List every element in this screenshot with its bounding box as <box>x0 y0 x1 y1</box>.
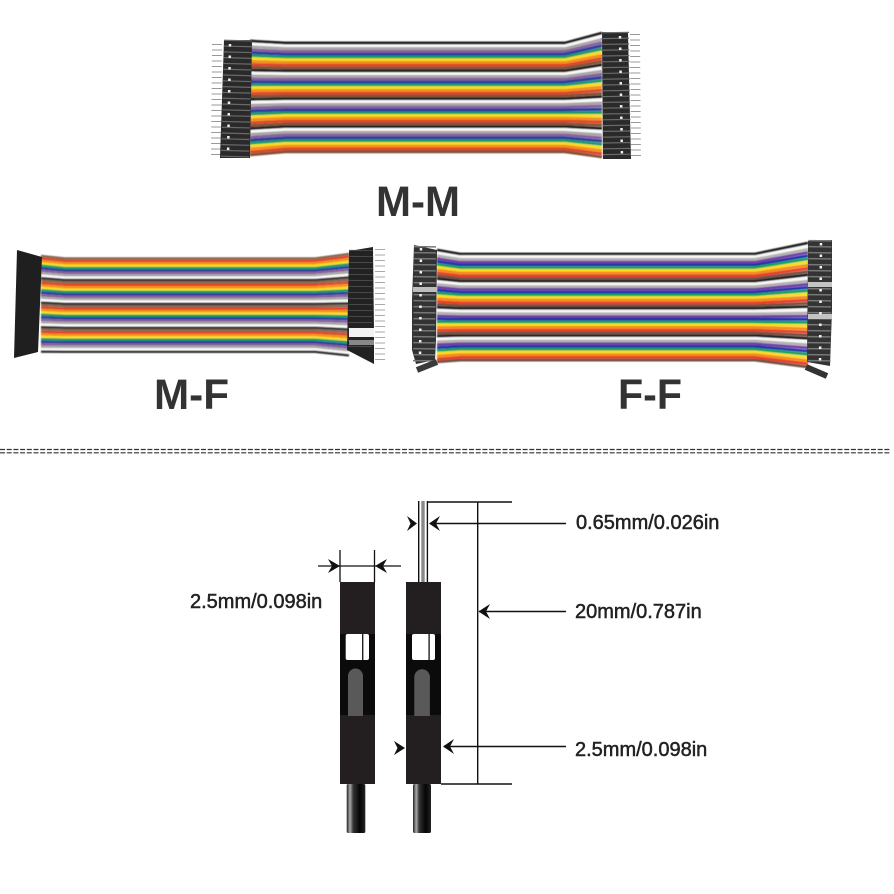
heading: M-M: M-M <box>376 178 460 226</box>
M-F rainbow wires <box>41 254 349 355</box>
M-M right connectors <box>602 32 636 159</box>
F-F rainbow wires <box>437 243 808 367</box>
dashed double divider <box>0 450 890 453</box>
label: 20mm: 20mm/0.787in <box>575 601 702 623</box>
wire pin at top of right connector <box>419 501 427 582</box>
arrow: 0.65mm pin width <box>407 516 566 531</box>
M-M left connectors <box>216 40 252 158</box>
M-F female connectors <box>14 250 42 358</box>
M-M rainbow wires <box>250 33 602 157</box>
label: 2.5mm left: 2.5mm/0.098in <box>190 591 322 613</box>
M-F jumper wire bundle <box>14 247 380 364</box>
left connector diagram <box>340 582 375 833</box>
arrow: 2.5mm connector width <box>394 739 566 755</box>
heading: M-F: M-F <box>154 371 229 419</box>
arrow: left width 2.5mm <box>318 550 401 582</box>
F-F jumper wire bundle <box>412 240 832 376</box>
label: 0.65mm: 0.65mm/0.026in <box>576 512 719 534</box>
dimension lines: 20mm length <box>427 502 512 784</box>
M-F male connectors <box>347 247 380 364</box>
M-M jumper wire bundle <box>216 32 636 159</box>
arrow: 20mm length <box>478 604 566 619</box>
label: 2.5mm right: 2.5mm/0.098in <box>575 739 707 761</box>
F-F right connectors <box>806 240 832 376</box>
heading: F-F: F-F <box>618 371 682 419</box>
right connector diagram <box>406 582 441 833</box>
F-F left connectors <box>412 245 437 370</box>
